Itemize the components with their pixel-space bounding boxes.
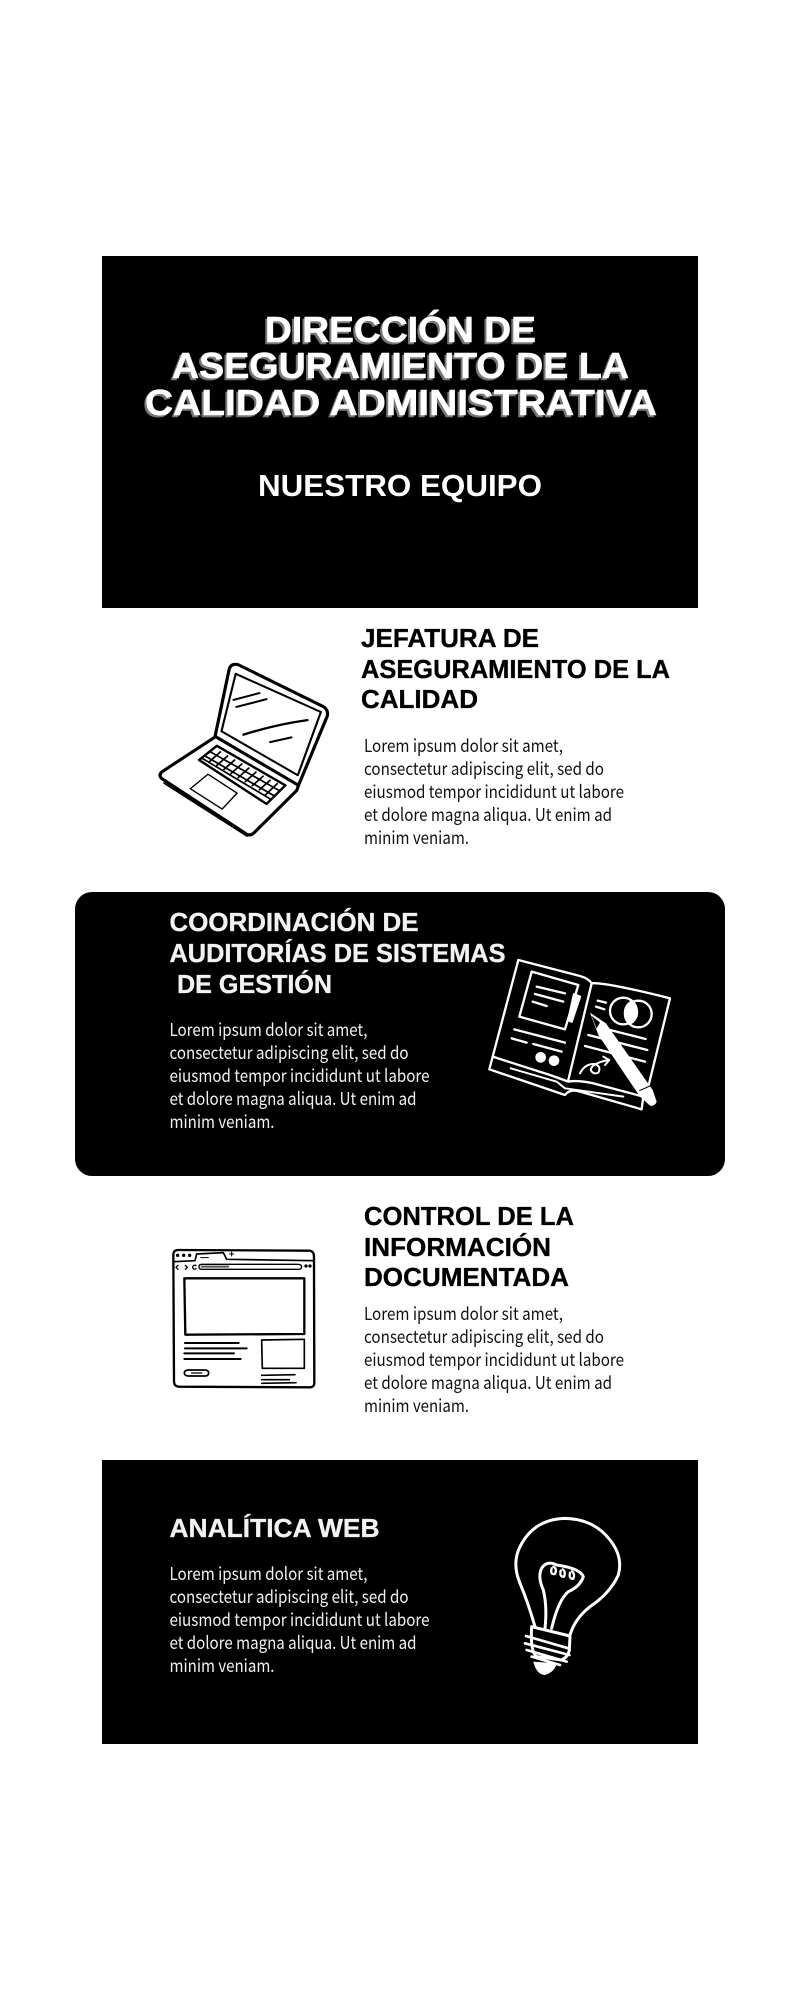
icon: browser window [173,1250,314,1387]
text block: jefatura: consectetur adipiscing elit, sed do [364,756,604,781]
text block: control: Lorem ipsum dolor sit amet, [364,1301,563,1326]
heading: coordinación: AUDITORÍAS DE SISTEMAS [170,938,506,968]
text block: coordinación: minim veniam. [170,1109,274,1134]
heading: jefatura: JEFATURA DE [361,623,539,653]
text block: analítica: consectetur adipiscing elit, sed do [170,1584,408,1609]
text block: jefatura: Lorem ipsum dolor sit amet, [364,733,563,758]
text block: analítica: minim veniam. [170,1653,274,1678]
heading: coordinación: DE GESTIÓN [177,969,332,999]
text block: control: et dolore magna aliqua. Ut enim ad [364,1370,612,1395]
panel: header [102,256,698,608]
text block: analítica: Lorem ipsum dolor sit amet, [170,1561,368,1586]
title: DIRECCIÓN DE [265,308,536,350]
text block: analítica: et dolore magna aliqua. Ut enim ad [170,1630,416,1655]
text block: coordinación: Lorem ipsum dolor sit amet, [170,1017,368,1042]
heading: jefatura [361,623,670,714]
text block: coordinación: et dolore magna aliqua. Ut enim ad [170,1086,416,1111]
text block: control: consectetur adipiscing elit, sed do [364,1324,604,1349]
title [145,308,657,423]
heading: control [364,1201,574,1292]
text block: control: eiusmod tempor incididunt ut labore [364,1347,624,1372]
icon: laptop [160,664,328,836]
heading: control: INFORMACIÓN [364,1232,551,1262]
heading: jefatura: ASEGURAMIENTO DE LA [361,654,670,684]
heading: analítica: ANALÍTICA WEB [170,1513,380,1543]
text block: control: minim veniam. [364,1393,469,1418]
heading: control: CONTROL DE LA [364,1201,574,1231]
panel: analítica [102,1460,698,1744]
subtitle: NUESTRO EQUIPO [258,468,542,503]
title: ASEGURAMIENTO DE LA [172,345,629,386]
text block: coordinación [170,1017,430,1134]
text block: jefatura: et dolore magna aliqua. Ut enim ad [364,802,612,827]
icon: light bulb [516,1518,620,1675]
text block: jefatura: eiusmod tempor incididunt ut labore [364,779,624,804]
text block: coordinación: eiusmod tempor incididunt ut labore [170,1063,430,1088]
text block: analítica [170,1561,430,1678]
text block: jefatura [364,733,624,850]
panel: coordinación [75,892,725,1176]
icon: open book with pen [489,960,670,1109]
text block: analítica: eiusmod tempor incididunt ut labore [170,1607,430,1632]
heading: coordinación: COORDINACIÓN DE [170,907,418,937]
text block: coordinación: consectetur adipiscing elit, sed do [170,1040,408,1065]
text block: control [364,1301,624,1418]
heading: coordinación [170,907,506,999]
title: CALIDAD ADMINISTRATIVA [145,382,657,423]
heading: jefatura: CALIDAD [361,684,478,714]
text block: jefatura: minim veniam. [364,825,469,850]
heading: control: DOCUMENTADA [364,1262,569,1292]
